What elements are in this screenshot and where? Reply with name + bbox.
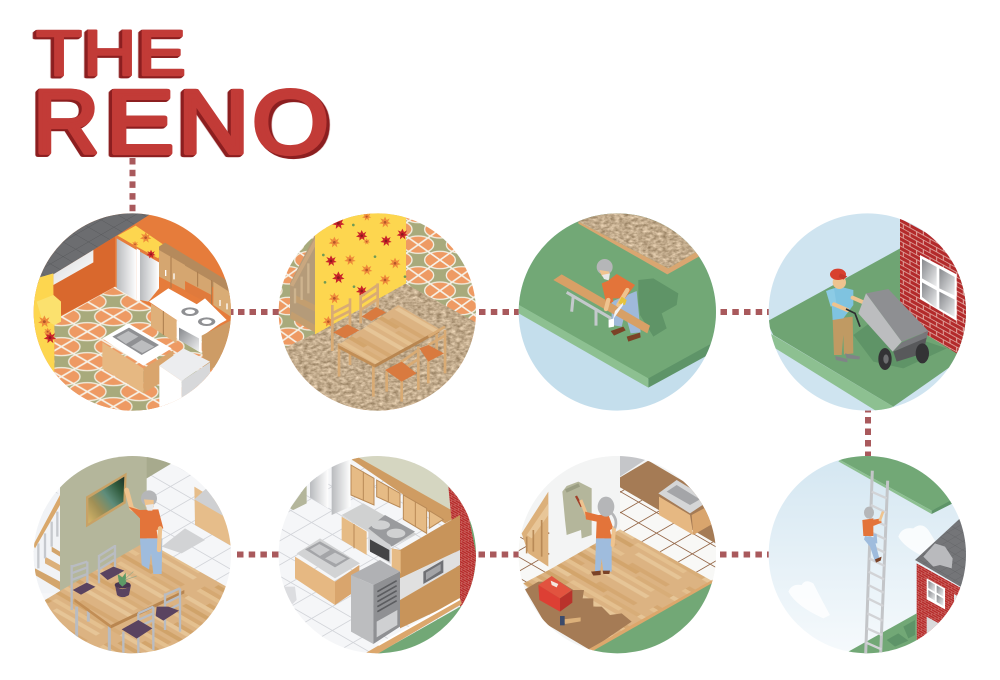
title: The Reno: H: [83, 17, 137, 89]
particle board floor: [285, 284, 476, 411]
upper wall section: [147, 457, 172, 478]
ladder: [866, 471, 888, 654]
range: [368, 515, 415, 564]
green slab above: [838, 447, 977, 514]
man sawing: [553, 259, 650, 342]
hammer: [560, 616, 581, 625]
man on ladder: [862, 507, 883, 563]
dining chairs back: [72, 545, 124, 610]
retro floor: [54, 286, 224, 411]
potted plant: [115, 572, 137, 597]
yellow wallpaper side: [34, 273, 61, 372]
sink island: [658, 480, 713, 535]
title: The Reno: T: [36, 17, 82, 89]
side wall: [53, 237, 115, 315]
man's shadow on tile: [162, 528, 205, 553]
lawn edges: [518, 305, 711, 388]
white wall: [549, 448, 620, 569]
man painting: [581, 497, 616, 576]
connector: right side vertical link: [865, 406, 871, 458]
plank: [553, 274, 650, 333]
stove: [177, 298, 227, 353]
dining chairs front: [122, 588, 180, 653]
staircase: [290, 235, 315, 332]
sawhorse: [567, 292, 610, 327]
lawn: [588, 579, 727, 667]
staircase: [25, 493, 60, 593]
title: The Reno: E: [106, 73, 174, 173]
connector: row one links: [227, 309, 774, 315]
stairs frame: [522, 492, 548, 567]
man hanging picture: [127, 490, 163, 574]
clouds: [788, 525, 937, 618]
cabinet soffit: [352, 457, 460, 523]
dishwasher box: [159, 348, 210, 407]
title: The Reno: E: [137, 17, 186, 89]
yellow wallpaper wall: [315, 205, 408, 334]
back wall: [352, 450, 487, 550]
lawn and floor edge: [365, 592, 487, 667]
right cabinet: [202, 320, 231, 370]
framed picture: [86, 473, 127, 527]
title: The Reno: N: [178, 72, 250, 173]
granite counter: [342, 503, 417, 555]
roof: [38, 213, 150, 284]
panel: hanging a picture in the dining room: [34, 456, 231, 654]
wood floor: [25, 545, 238, 667]
valance wallpaper: [118, 226, 164, 258]
title: The Reno: R: [33, 73, 99, 173]
diamond tiles: [510, 530, 549, 583]
upper cabinets: [351, 465, 443, 533]
doorway: [117, 238, 159, 302]
wheelbarrow bin: [846, 289, 929, 370]
island with sink: [295, 538, 360, 605]
island: [102, 323, 173, 393]
chairs, front pair: [385, 327, 445, 402]
olive wall: [60, 447, 172, 593]
tall peninsula with counter and microwave: [392, 515, 460, 628]
shadow: [638, 278, 678, 337]
wood floor: [523, 529, 713, 650]
kitchen island edge: [194, 487, 238, 550]
title: The Reno: [33, 17, 329, 173]
particle board slab: [578, 213, 699, 274]
dining table: [338, 305, 439, 397]
lawn top: [518, 213, 716, 379]
brick wall: [900, 219, 966, 354]
chair seats back: [333, 307, 386, 338]
exposed subfloor: [525, 582, 632, 650]
table: [74, 565, 184, 652]
kitchen subfloor and back wall: [620, 455, 727, 550]
panel: subfloor dining room: [278, 213, 476, 411]
neighbouring house: [915, 518, 977, 667]
counter and base cabinets: [149, 288, 225, 343]
lawn: [767, 247, 977, 413]
man pushing bin: [826, 269, 863, 362]
window strip: [53, 250, 93, 285]
connector: row two links: [237, 552, 774, 558]
backsplash and upper cabinets: [159, 243, 233, 318]
paint patch and roller: [562, 482, 592, 538]
panel: climbing the ladder to the roof: [760, 447, 977, 667]
dining chairs, back pair: [332, 283, 378, 351]
panel: old kitchen: [34, 213, 231, 411]
refrigerator: [351, 560, 400, 644]
bin shadow: [853, 322, 947, 368]
panel: new kitchen: [270, 450, 487, 667]
toolbox: [538, 576, 572, 612]
brick wall sliver: [448, 487, 483, 607]
green strip below: [848, 613, 917, 667]
title: The Reno: O: [252, 72, 329, 173]
connector: title to kitchen: [130, 158, 136, 213]
panel: sawing a plank on the lawn: [518, 213, 716, 411]
panel: painting the wall and fixing the floor: [510, 448, 727, 667]
kitchen tiles: [620, 487, 727, 582]
window: [920, 255, 957, 321]
panel: moving a bin by the brick wall: [768, 213, 966, 411]
doorway: [290, 458, 351, 515]
chair hint: [282, 587, 297, 607]
